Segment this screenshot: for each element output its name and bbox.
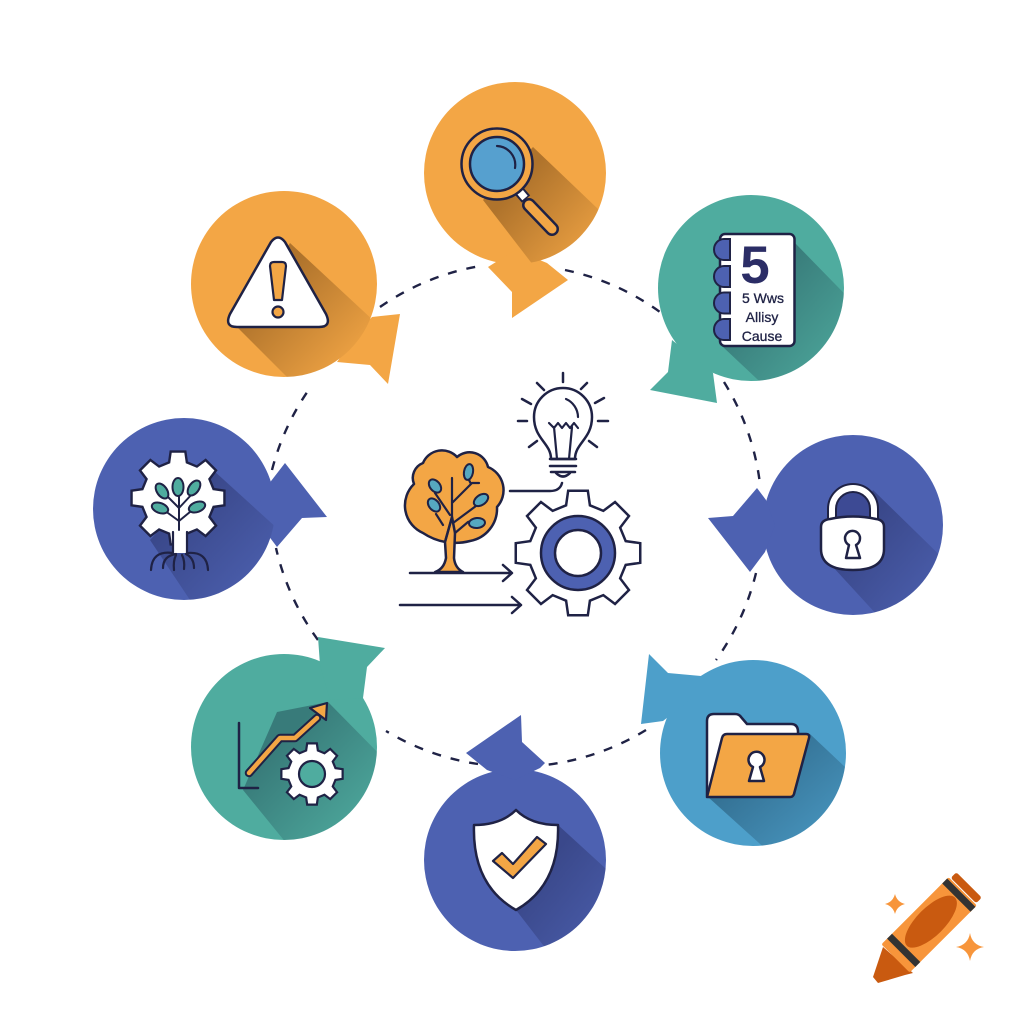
step: lock in (padlock): [708, 435, 943, 615]
notebook label: 5 Wws: [742, 290, 784, 306]
arrow: upper input: [410, 565, 512, 581]
sparkle small: [885, 894, 905, 914]
long shadow: [723, 244, 844, 381]
long shadow: [517, 826, 606, 946]
rings: [714, 239, 730, 340]
connector: [510, 483, 562, 491]
trunk and roots: [173, 532, 187, 553]
step: problem alert (warning): [191, 191, 400, 400]
icon: crayon badge: [873, 871, 984, 983]
light rays: [518, 373, 608, 447]
tree branches: [161, 492, 196, 530]
icon: central gear: [516, 491, 640, 615]
step: root cause (gear tree): [93, 418, 327, 620]
long shadow: [238, 243, 370, 377]
long shadow: [243, 702, 377, 840]
icon: small gear: [281, 743, 343, 805]
step: verify (shield): [424, 715, 606, 951]
icon: warning triangle: [228, 238, 328, 327]
leaves: [150, 478, 207, 516]
arrow: lower input: [400, 597, 521, 613]
notebook label: [742, 290, 784, 344]
dashed cycle ring: [272, 266, 760, 765]
bubble: orange top: [424, 82, 606, 264]
notebook label: Allisy: [746, 309, 778, 325]
pointer: [650, 340, 717, 403]
icon: light bulb: [510, 373, 608, 491]
bubble: orange upper left: [191, 191, 377, 377]
icon: magnifying glass: [462, 128, 552, 229]
icon: rising chart: [239, 703, 327, 788]
big number: 5: [740, 236, 770, 295]
bubble: indigo right: [763, 435, 943, 615]
bubble: indigo bottom: [424, 769, 606, 951]
bubble: teal lower left: [191, 654, 377, 840]
long shadow: [150, 472, 274, 600]
pointer: [708, 488, 775, 572]
step: 5 whys (notebook): [650, 195, 844, 403]
sparkle large: [956, 933, 984, 961]
center illustration: [400, 373, 640, 615]
icon: tree: [405, 450, 504, 572]
bubble: indigo left: [93, 418, 275, 600]
bubble: teal upper right: [658, 195, 844, 381]
pointer: [488, 250, 568, 318]
notebook label: Cause: [742, 328, 782, 344]
long shadow: [483, 147, 598, 262]
pointer: [260, 463, 327, 547]
icon: folder: [707, 714, 809, 797]
pointer: [318, 637, 385, 700]
icon: notebook: [714, 234, 794, 346]
crayon tip: [873, 947, 913, 983]
long shadow: [835, 490, 938, 612]
long shadow: [710, 734, 845, 846]
step: improve (chart and gear): [191, 637, 385, 840]
step: investigate (magnifying glass): [424, 82, 620, 318]
pointer: [337, 314, 400, 384]
icon: shield: [474, 810, 558, 910]
step: secure files (folder): [641, 654, 846, 846]
bubble: light blue lower right: [660, 660, 846, 846]
icon: padlock: [821, 488, 884, 570]
pointer: [641, 654, 701, 724]
icon: gear with tree: [132, 452, 224, 570]
tree leaves: [425, 463, 490, 529]
crayon body: [881, 871, 983, 973]
pointer: [466, 715, 545, 780]
